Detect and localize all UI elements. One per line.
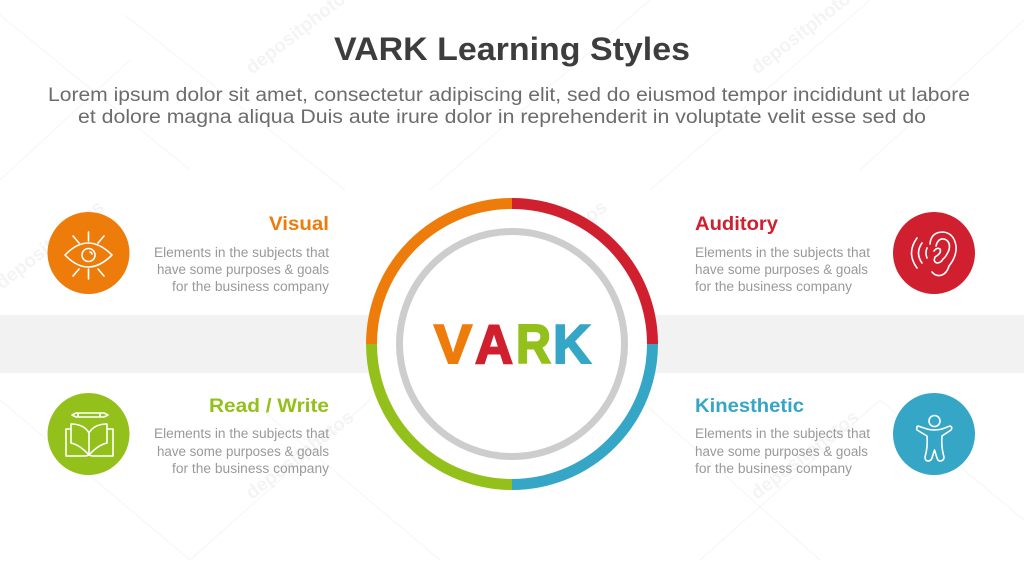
description: read / write: Elements in the subjects that — [154, 426, 329, 441]
subtitle — [48, 85, 970, 128]
description: kinesthetic: for the business company — [695, 461, 852, 476]
text: depositphotos — [747, 407, 863, 504]
VARK wordmark — [434, 313, 591, 375]
heading: visual: Visual — [269, 214, 329, 235]
subtitle: et dolore magna aliqua Duis aute irure dolor in reprehenderit in voluptate velit esse sed do — [78, 107, 926, 128]
icon: book and pencil — [48, 393, 130, 475]
panel: auditory — [695, 212, 975, 294]
panel: read / write — [48, 393, 329, 476]
description: auditory: Elements in the subjects that — [695, 245, 870, 260]
description: kinesthetic — [695, 426, 870, 476]
subtitle: Lorem ipsum dolor sit amet, consectetur adipiscing elit, sed do eiusmod tempor incididunt ut labore — [48, 85, 970, 106]
heading: kinesthetic: Kinesthetic — [695, 396, 804, 417]
description: visual: Elements in the subjects that — [154, 245, 329, 260]
description: read / write: have some purposes & goals — [157, 444, 329, 459]
description: visual: for the business company — [172, 279, 329, 294]
icon: ear — [893, 212, 975, 294]
icon: person — [893, 393, 975, 475]
description: read / write — [154, 426, 329, 476]
title: VARK Learning Styles — [334, 31, 690, 67]
description: read / write: for the business company — [172, 461, 329, 476]
panel: visual — [48, 212, 329, 294]
heading: auditory: Auditory — [695, 214, 778, 235]
central ring diagram — [366, 198, 658, 490]
ring segment: visual — [372, 204, 512, 344]
text: depositphotos — [495, 197, 611, 294]
VARK wordmark: A — [475, 313, 513, 375]
description: auditory: for the business company — [695, 279, 852, 294]
inner grey ring — [400, 232, 624, 456]
VARK wordmark: V — [434, 313, 472, 375]
ring segment: kinesthetic — [512, 344, 652, 484]
description: kinesthetic: Elements in the subjects that — [695, 426, 870, 441]
description: kinesthetic: have some purposes & goals — [695, 444, 868, 459]
text: depositphotos — [242, 407, 358, 504]
VARK wordmark: R — [516, 313, 551, 375]
heading: read / write: Read / Write — [209, 396, 329, 417]
panel: kinesthetic — [695, 393, 975, 476]
description: auditory: have some purposes & goals — [695, 262, 868, 277]
ring segment: read / write — [372, 344, 512, 484]
horizontal band — [0, 315, 1024, 373]
ring segment: auditory — [512, 204, 652, 344]
VARK wordmark: K — [553, 313, 591, 375]
description: auditory — [695, 245, 870, 294]
description: visual — [154, 245, 329, 294]
description: visual: have some purposes & goals — [157, 262, 329, 277]
icon: eye — [48, 212, 130, 294]
